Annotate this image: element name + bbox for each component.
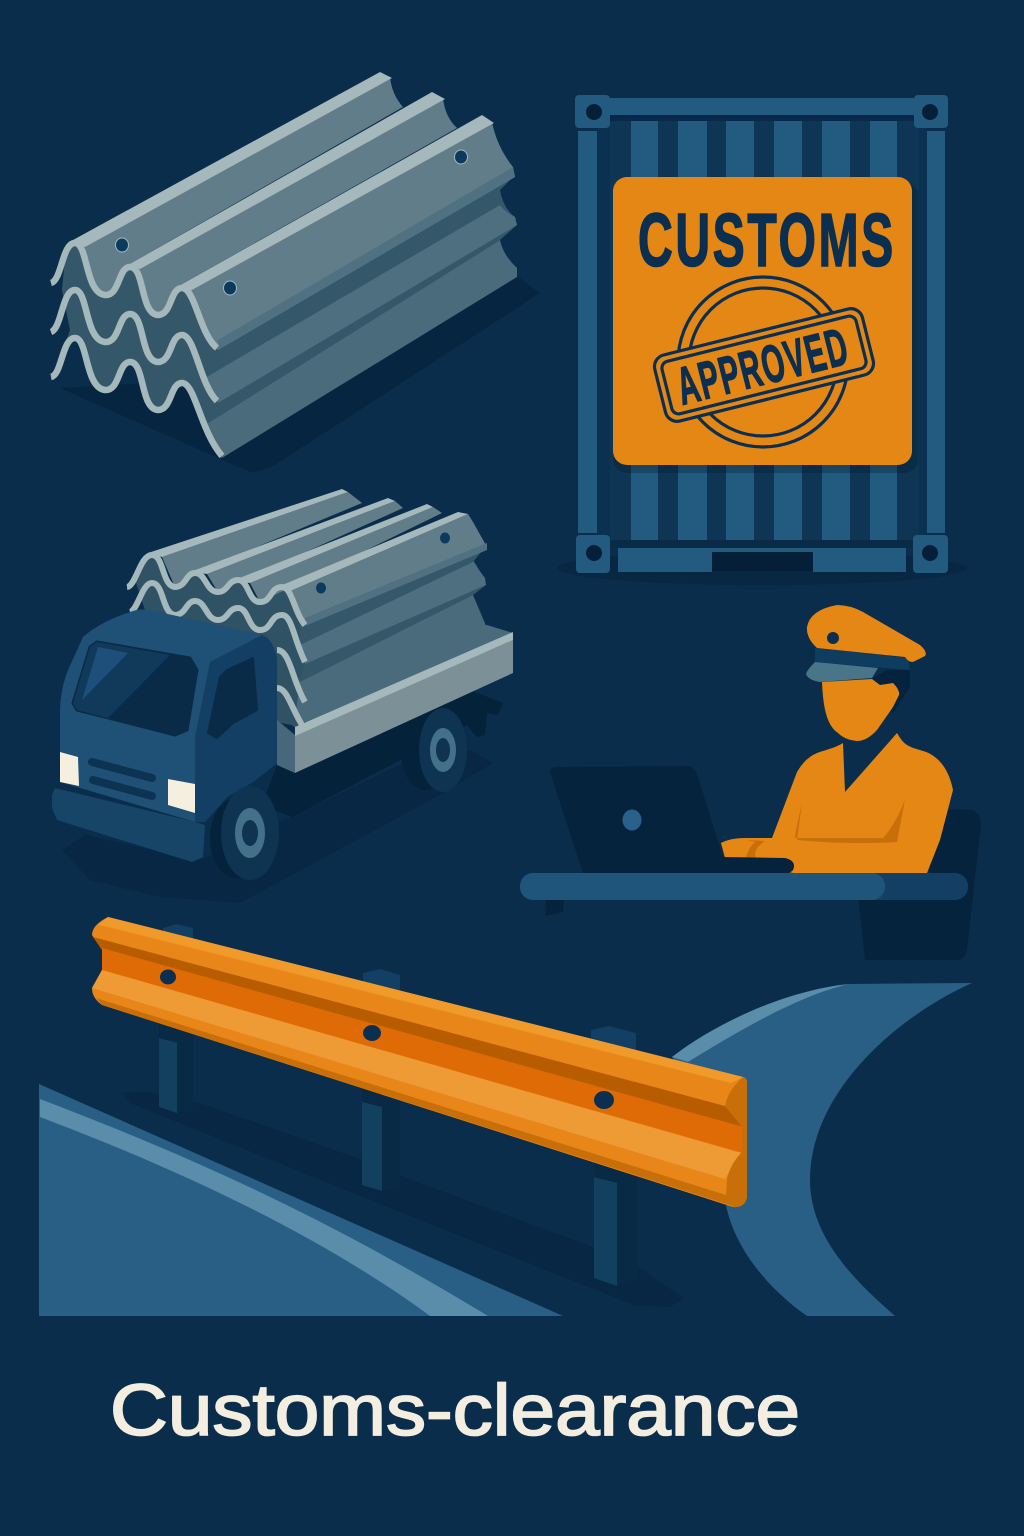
shaded gaps between stacked wave profiles	[56, 243, 222, 458]
container ground shadow	[557, 551, 967, 585]
bumper	[52, 788, 205, 862]
officer body	[721, 733, 953, 873]
top beam	[605, 98, 920, 115]
beam faces, middle layer	[205, 190, 517, 425]
illustration: road with guardrail	[39, 917, 972, 1316]
chassis under bed	[262, 690, 503, 817]
upper shadow band	[93, 937, 743, 1127]
load ridge highlights	[148, 489, 468, 592]
pallet notch	[712, 552, 813, 571]
rail end cap, upper	[725, 1077, 747, 1153]
curved road highlight	[672, 984, 849, 1062]
corrugation stripes	[631, 121, 897, 540]
load front lip	[305, 543, 487, 626]
cap badge	[827, 632, 839, 644]
desk top, lit	[520, 873, 885, 900]
guardrail ground shadow	[122, 1092, 684, 1307]
illustration: customs officer at laptop	[520, 605, 981, 960]
post 2	[362, 969, 400, 1191]
side posts	[578, 128, 945, 538]
bed rear end	[277, 720, 295, 773]
rail silhouette	[92, 917, 747, 1207]
top beam, front face	[188, 122, 515, 350]
front lip of top beam	[218, 167, 515, 350]
truck ground shadow	[62, 750, 493, 903]
illustration: truck carrying guardrail beams	[52, 489, 513, 903]
top light strip	[98, 917, 743, 1083]
beam faces, bottom layer	[205, 240, 517, 458]
rail end cap, lower	[726, 1150, 747, 1207]
bed top rim	[295, 632, 513, 736]
corner holes	[586, 104, 938, 561]
load top faces	[162, 492, 487, 622]
top beam, middle face	[138, 98, 457, 313]
laptop logo	[622, 810, 642, 830]
load bolt holes	[316, 532, 450, 594]
corner castings	[575, 95, 948, 573]
dark band under top beam	[205, 175, 515, 378]
ridge highlights	[73, 72, 494, 291]
load layers on the side	[295, 545, 487, 723]
arm crease shading	[795, 800, 905, 843]
shadow under top beam	[610, 115, 915, 121]
road edge stripe	[40, 1099, 488, 1316]
rear wheel	[401, 708, 467, 792]
stamp label: APPROVED	[671, 317, 855, 417]
post 3	[591, 1026, 637, 1286]
orange guardrail beam	[92, 917, 747, 1207]
container back panel	[604, 118, 924, 543]
desk top, shadowed	[520, 873, 968, 900]
cap visor	[806, 662, 878, 682]
front wheel	[210, 786, 279, 880]
wave end profiles	[51, 243, 222, 456]
cab side panel	[195, 635, 277, 822]
grille	[92, 762, 152, 796]
face	[822, 679, 899, 741]
orange customs sign	[613, 177, 912, 465]
hair	[873, 670, 910, 713]
chair	[858, 809, 981, 960]
laptop	[550, 766, 794, 873]
central channel	[102, 948, 743, 1153]
bottom beam	[610, 540, 915, 548]
lower light band	[92, 970, 741, 1179]
cab body	[60, 609, 277, 822]
side window	[208, 658, 257, 738]
desk leg	[545, 900, 564, 916]
illustration: stack of guardrail beams	[51, 72, 540, 472]
approved stamp	[652, 277, 876, 447]
windshield reflection	[82, 647, 128, 700]
windshield sheen	[73, 642, 170, 718]
load shaded gaps	[135, 555, 305, 728]
sign shadow	[613, 182, 918, 473]
curved road at right	[672, 983, 972, 1316]
road surface at left	[39, 1084, 563, 1316]
post 1	[159, 924, 193, 1113]
bottom shadow strip	[96, 998, 736, 1207]
headlights	[60, 752, 195, 813]
cap crown	[807, 605, 926, 662]
rail holes	[160, 970, 614, 1109]
cap band	[815, 648, 910, 670]
load wave profiles	[127, 555, 305, 725]
top beam, rear face	[83, 77, 403, 293]
bed side panel	[295, 640, 513, 773]
bolt holes	[116, 150, 468, 295]
illustration: shipping container with customs sign	[557, 95, 967, 585]
windshield	[73, 642, 197, 735]
title: Customs-clearance	[110, 1371, 800, 1451]
hand shading	[746, 840, 765, 858]
sign heading: CUSTOMS	[638, 199, 896, 283]
stack ground shadow	[60, 276, 540, 472]
stamp rings	[678, 277, 848, 447]
truck bed interior	[277, 625, 513, 727]
